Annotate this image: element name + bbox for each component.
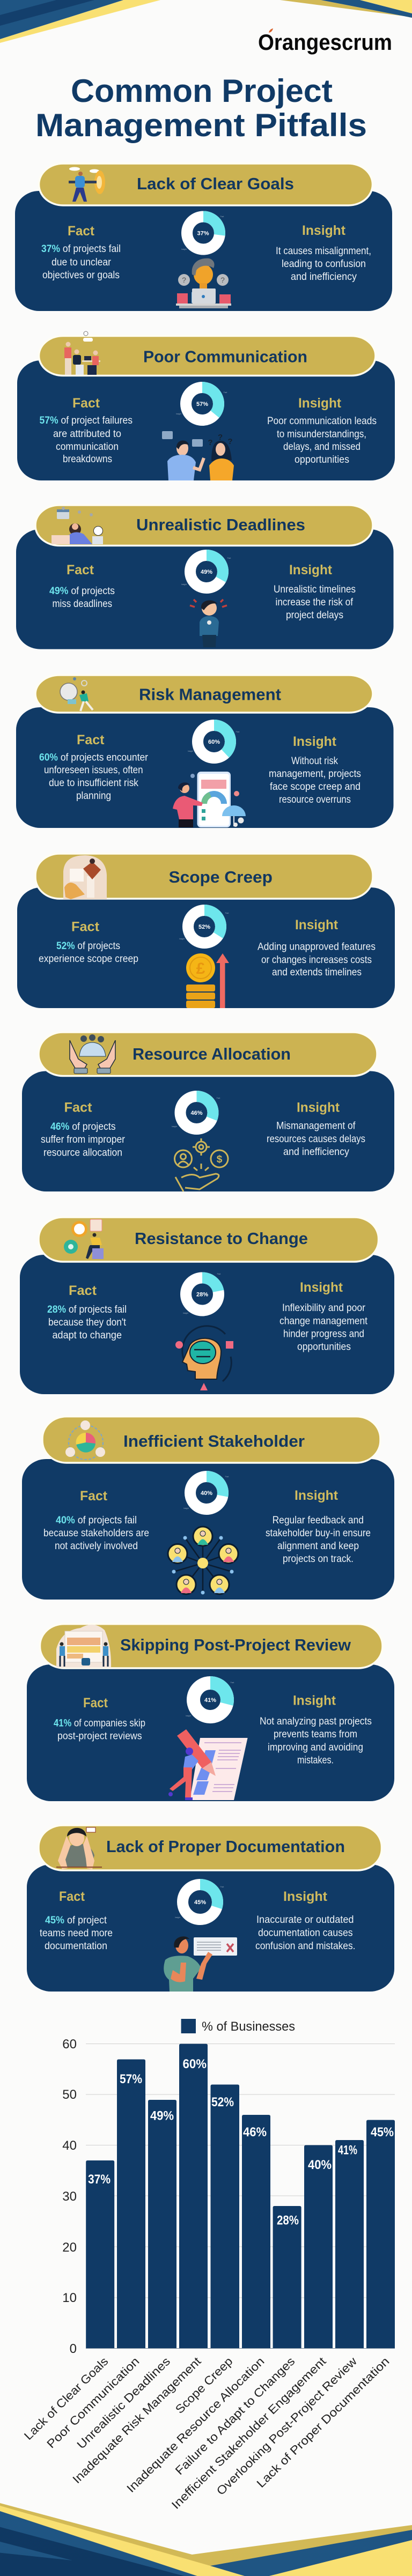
fact: 60% of projects encounter: [39, 752, 149, 764]
fact: 28% of projects fail: [47, 1304, 127, 1315]
fact: [40, 1889, 113, 1952]
donut chart: 49%: Insight: [181, 583, 187, 586]
insight: prevents teams from: [274, 1729, 357, 1740]
heading pill: Lack of Proper Documentation: [106, 1837, 345, 1856]
fact: [39, 919, 138, 965]
icon: stakeholder circle: [65, 1420, 105, 1460]
insight: leading to confusion: [282, 258, 366, 270]
insight: increase the risk of: [276, 597, 354, 608]
donut chart: 52%: [179, 911, 229, 943]
heading pill: [35, 675, 373, 713]
insight: resources causes delays: [267, 1134, 365, 1145]
insight: Mismanagement of: [276, 1121, 356, 1132]
icon: checklist illustration: [63, 855, 107, 899]
donut chart: 52%: Fact: [225, 912, 229, 914]
insight: hinder progress and: [283, 1329, 364, 1339]
icon: gears, clock and seated man: [64, 1219, 104, 1259]
y axis labels and gridlines: 0: [70, 2342, 77, 2356]
x axis labels: Lack of Proper Documentation: [254, 2355, 392, 2490]
x axis labels: Scope Creep: [173, 2355, 236, 2416]
fact: Fact: [67, 562, 94, 578]
y axis labels and gridlines: 30: [62, 2189, 77, 2204]
donut chart: 57%: Fact: [224, 391, 227, 394]
fact: post-project reviews: [57, 1731, 142, 1742]
fact: unforeseen issues, often: [44, 765, 143, 776]
insight: or changes increases costs: [261, 954, 372, 966]
x axis labels: Inadequate Resource Allocation: [124, 2355, 267, 2495]
panel: Inefficient Stakeholder: [22, 1417, 394, 1600]
insight: projects on track.: [283, 1553, 354, 1565]
fact: Fact: [77, 732, 105, 747]
x axis labels: Overlooking Post-Project Review: [214, 2355, 359, 2498]
y axis labels and gridlines: 40: [62, 2138, 77, 2153]
fact: 41% of companies skip: [54, 1718, 145, 1729]
fact: teams need more: [40, 1928, 113, 1939]
insight: [269, 734, 361, 805]
insight: Inaccurate or outdated: [256, 1914, 354, 1926]
donut chart: 60%: Fact: [236, 731, 239, 733]
bar value labels: [88, 2057, 394, 2228]
x axis labels: Inadequate Risk Management: [70, 2355, 204, 2486]
x axis labels: Lack of Clear Goals: [21, 2355, 111, 2442]
heading pill: Inefficient Stakeholder: [123, 1432, 305, 1450]
heading pill: Skipping Post-Project Review: [120, 1635, 351, 1654]
fact: 45% of project: [45, 1915, 107, 1926]
bar value labels: 28%: [277, 2214, 299, 2228]
heading pill: Risk Management: [139, 685, 281, 704]
panel: Resistance to Change: [20, 1217, 394, 1394]
fact: 46% of projects: [50, 1121, 116, 1132]
panel: Lack of Clear Goals: [15, 164, 392, 311]
insight: [267, 396, 377, 465]
insight: face scope creep and: [270, 781, 360, 793]
bar value labels: 40%: [308, 2158, 332, 2172]
donut chart: 45%: [175, 1884, 224, 1920]
fact: Fact: [72, 396, 100, 411]
insight: and extends timelines: [272, 967, 362, 978]
heading pill: Poor Communication: [143, 347, 307, 366]
x axis labels: Unrealistic Deadlines: [74, 2355, 173, 2452]
heading pill: [40, 1624, 382, 1668]
fact: resource allocation: [43, 1148, 122, 1158]
icon: woman with calendar and clock: [52, 507, 103, 544]
fact: 40% of projects fail: [56, 1515, 137, 1526]
y axis labels and gridlines: 60: [62, 2037, 77, 2052]
insight: [267, 1100, 365, 1158]
fact: Fact: [83, 1696, 108, 1711]
icon: angry man checking watch: [190, 599, 227, 647]
donut chart: 60%: [188, 725, 239, 758]
insight: resource overruns: [279, 794, 351, 805]
insight: [255, 1889, 355, 1952]
donut chart: 45%: 45%: [194, 1899, 206, 1906]
bars: [86, 2044, 395, 2348]
x axis labels: Inefficient Stakeholder Engagement: [169, 2355, 329, 2512]
insight: [279, 1280, 368, 1352]
icon: hands holding team: [70, 1034, 115, 1074]
bar value labels: 57%: [120, 2072, 142, 2086]
insight: Insight: [298, 396, 342, 411]
donut chart: 28%: [183, 1273, 220, 1314]
donut chart: 60%: 60%: [208, 739, 220, 745]
y axis labels and gridlines: 10: [62, 2291, 77, 2305]
icon: stressed man holding head: [56, 1827, 102, 1869]
insight: Insight: [300, 1280, 343, 1295]
insight: Insight: [283, 1889, 328, 1904]
donut chart: 57%: [176, 387, 227, 420]
heading pill: [35, 854, 373, 899]
insight: Poor communication leads: [267, 416, 377, 427]
y axis labels and gridlines: [62, 2037, 395, 2356]
fact: not actively involved: [55, 1541, 138, 1552]
x axis labels: [21, 2355, 392, 2512]
insight: documentation causes: [258, 1928, 353, 1939]
panel: Skipping Post-Project Review: [27, 1624, 394, 1801]
donut chart: 37%: Insight: [181, 248, 187, 250]
panel: Unrealistic Deadlines: [16, 505, 394, 649]
icon: gear, person and dollar over hand: [175, 1138, 228, 1191]
icon: two confused people: [162, 431, 234, 480]
fact: are attributed to: [53, 428, 121, 440]
icon: stakeholder network: [168, 1527, 238, 1595]
insight: Insight: [295, 1488, 339, 1503]
donut chart: 45%: Fact: [220, 1886, 224, 1888]
icon: two confused people: ?: [218, 433, 223, 442]
icon: person with risk gauge phone: [173, 772, 246, 827]
fact: [39, 732, 149, 802]
insight: Insight: [289, 562, 333, 578]
insight: delays, and missed: [283, 441, 360, 453]
insight: Insight: [295, 917, 339, 932]
donut chart: 49%: 49%: [201, 569, 212, 575]
footer decoration: [0, 2503, 412, 2576]
donut chart: 40%: Fact: [225, 1476, 229, 1478]
heading pill: [39, 1217, 379, 1262]
donut chart: 46%: Insight: [172, 1126, 177, 1128]
fact: Fact: [59, 1889, 85, 1904]
donut chart: 60%: Insight: [188, 750, 193, 752]
insight: Insight: [302, 223, 346, 238]
heading pill: [39, 1825, 382, 1870]
fact: breakdowns: [63, 454, 112, 465]
fact: 57% of project failures: [40, 415, 133, 426]
donut chart: 28%: 28%: [196, 1291, 208, 1298]
donut chart: 40%: Insight: [183, 1507, 189, 1509]
donut chart: 49%: Fact: [227, 557, 231, 559]
heading pill: Resistance to Change: [135, 1229, 308, 1248]
icon: confused person at laptop: [176, 258, 231, 308]
fact: suffer from improper: [41, 1134, 126, 1145]
fact: due to insufficient risk: [49, 778, 138, 789]
heading pill: Lack of Clear Goals: [137, 174, 294, 193]
header decoration: top left: [0, 0, 160, 43]
insight: [276, 223, 371, 283]
fact: documentation: [45, 1941, 107, 1952]
donut chart: 40%: [183, 1476, 229, 1509]
donut chart: 41%: [186, 1682, 234, 1717]
bar value labels: 46%: [243, 2125, 267, 2140]
bar chart: % of Businesses: [21, 2019, 395, 2512]
x axis labels: Poor Communication: [44, 2355, 142, 2451]
heading pill: Unrealistic Deadlines: [136, 515, 305, 534]
bar value labels: 60%: [182, 2057, 207, 2071]
fact: [49, 562, 115, 610]
insight: Regular feedback and: [273, 1515, 364, 1526]
donut chart: 52%: Insight: [179, 938, 185, 940]
fact: Fact: [71, 919, 100, 934]
donut chart: 37%: 37%: [197, 231, 209, 237]
insight: Without risk: [291, 756, 338, 767]
insight: Adding unapproved features: [258, 942, 376, 953]
insight: [260, 1693, 372, 1766]
donut chart: 28%: Insight: [183, 1312, 188, 1314]
fact: due to unclear: [52, 257, 112, 268]
donut chart: 45%: Insight: [175, 1916, 180, 1919]
insight: and inefficiency: [291, 271, 357, 283]
insight: It causes misalignment,: [276, 246, 371, 257]
panel: Poor Communication: [17, 331, 395, 480]
fact: 37% of projects fail: [41, 243, 121, 255]
insight: opportunities: [297, 1342, 351, 1352]
chart legend: % of Businesses: [202, 2019, 295, 2034]
donut chart: 46%: Fact: [217, 1097, 220, 1099]
icon: two confused people: ?: [227, 437, 233, 446]
panel: Risk Management: [16, 675, 394, 828]
fact: 49% of projects: [49, 586, 115, 597]
donut chart: 41%: Insight: [186, 1715, 191, 1717]
donut chart: 41%: 41%: [204, 1697, 216, 1704]
heading pill: [39, 164, 372, 205]
insight: stakeholder buy-in ensure: [266, 1528, 371, 1539]
donut chart: 57%: Insight: [176, 413, 181, 415]
bar value labels: 49%: [150, 2108, 174, 2123]
x axis labels: Failure to Adapt to Changes: [173, 2355, 298, 2477]
fact: Fact: [69, 1283, 97, 1298]
icon: thinking man with rejected document: [164, 1936, 237, 1992]
icon: two confused people: ?: [208, 438, 213, 447]
insight: Unrealistic timelines: [274, 584, 356, 595]
fact: [54, 1696, 145, 1742]
insight: mistakes.: [297, 1755, 334, 1766]
fact: [41, 224, 121, 281]
bar value labels: 37%: [88, 2172, 111, 2187]
insight: [274, 562, 356, 621]
icon: kanban board with people: [56, 1625, 111, 1668]
insight: alignment and keep: [277, 1541, 359, 1552]
insight: [258, 917, 376, 978]
insight: confusion and mistakes.: [255, 1941, 355, 1952]
donut chart: 40%: 40%: [201, 1490, 212, 1497]
icon: coin stack with rising arrow: [186, 953, 229, 1008]
insight: Inflexibility and poor: [282, 1302, 366, 1314]
fact: Fact: [68, 224, 95, 239]
header decoration: top right: [280, 0, 412, 18]
fact: [40, 396, 133, 465]
fact: [41, 1100, 126, 1158]
heading pill: [39, 1032, 377, 1076]
donut chart: 52%: 52%: [198, 924, 210, 930]
insight: Not analyzing past projects: [260, 1716, 372, 1727]
bar value labels: 52%: [211, 2095, 234, 2109]
icon: coin stack with rising arrow: £: [196, 960, 205, 978]
insight: Insight: [293, 734, 337, 749]
donut chart: 28%: Fact: [217, 1273, 220, 1275]
icon: confused person at laptop: ?: [182, 276, 186, 284]
fact: experience scope creep: [39, 953, 138, 965]
fact: communication: [56, 441, 119, 453]
panel: Scope Creep: [17, 854, 395, 1008]
heading pill: Scope Creep: [168, 868, 273, 886]
bar value labels: 41%: [338, 2143, 357, 2158]
insight: Insight: [293, 1693, 336, 1708]
donut chart: 57%: 57%: [196, 401, 208, 408]
donut chart: 37%: [181, 216, 224, 250]
fact: objectives or goals: [42, 270, 120, 281]
donut chart: 49%: [181, 556, 231, 588]
icon: team in conversation: [64, 331, 100, 375]
logo: Orangescrum: Orangescrum: [258, 29, 392, 55]
fact: because stakeholders are: [43, 1528, 149, 1539]
icon: man with arrow and target: [69, 167, 105, 202]
heading pill: Resource Allocation: [133, 1045, 291, 1063]
panel: Lack of Proper Documentation: [27, 1825, 394, 1992]
fact: [43, 1489, 149, 1552]
title: Management Pitfalls: [35, 107, 367, 143]
donut chart: 46%: 46%: [190, 1110, 203, 1116]
fact: planning: [76, 790, 111, 802]
insight: change management: [279, 1316, 368, 1327]
y axis labels and gridlines: 50: [62, 2088, 77, 2102]
heading pill: [35, 505, 373, 546]
icon: gear, person and dollar over hand: $: [217, 1154, 223, 1165]
insight: [266, 1488, 371, 1565]
fact: 52% of projects: [56, 941, 120, 952]
fact: adapt to change: [53, 1330, 122, 1341]
heading pill: [42, 1417, 380, 1463]
insight: improving and avoiding: [268, 1742, 363, 1753]
title: [35, 73, 367, 143]
insight: and inefficiency: [283, 1146, 349, 1158]
insight: management, projects: [269, 768, 361, 780]
donut chart: 41%: Fact: [231, 1682, 234, 1684]
icon: head with gear and change arrows: [175, 1326, 233, 1390]
panel: Resource Allocation: [22, 1032, 394, 1191]
donut chart: 37%: Fact: [220, 216, 224, 218]
y axis labels and gridlines: 20: [62, 2240, 77, 2255]
insight: to misunderstandings,: [277, 429, 366, 440]
fact: [47, 1283, 127, 1341]
fact: miss deadlines: [53, 598, 112, 610]
fact: because they don't: [48, 1317, 127, 1328]
title: Common Project: [71, 73, 333, 109]
insight: Insight: [297, 1100, 340, 1115]
fact: Fact: [80, 1489, 108, 1504]
heading pill: [39, 336, 376, 375]
insight: project delays: [286, 610, 343, 621]
donut chart: 46%: [172, 1096, 220, 1129]
icon: woman with giant pencil on document: [168, 1729, 248, 1800]
icon: woman with idea sphere: [60, 677, 93, 711]
fact: Fact: [64, 1100, 92, 1115]
icon: confused person at laptop: ?: [220, 276, 225, 284]
bar value labels: 45%: [371, 2125, 394, 2140]
insight: opportunities: [295, 454, 349, 465]
